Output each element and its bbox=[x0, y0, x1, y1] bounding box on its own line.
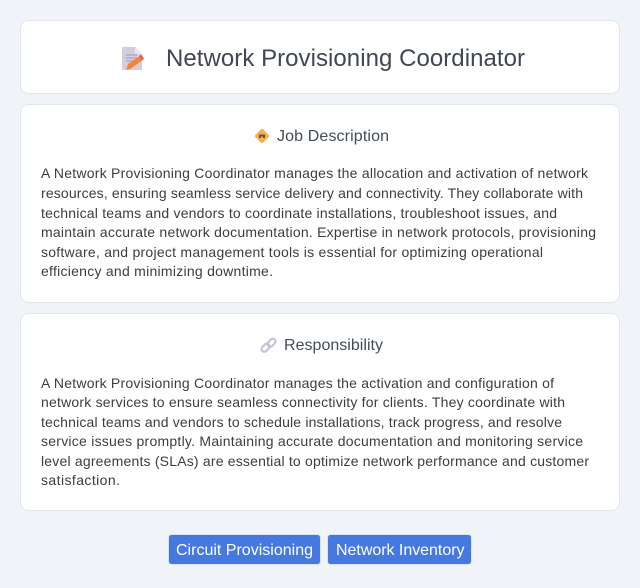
text block: job description: maintain accurate network documentation. Expertise in network protocols, provisioning bbox=[41, 224, 596, 240]
heading: job description: Job Description bbox=[277, 128, 389, 145]
tag: network inventory bbox=[328, 534, 472, 564]
text block: job description: resources, ensuring seamless service delivery and connectivity. They collaborate with bbox=[41, 185, 583, 201]
text block: responsibility: network services to ensure seamless connectivity for clients. They coordinate with bbox=[41, 394, 565, 410]
text block: responsibility: A Network Provisioning Coordinator manages the activation and configuration of bbox=[41, 375, 554, 391]
text block: job description: A Network Provisioning Coordinator manages the allocation and activation of network bbox=[41, 165, 589, 181]
title: Network Provisioning Coordinator bbox=[166, 45, 525, 72]
text block: job description: technical teams and vendors to coordinate installations, troubleshoot issues, and bbox=[41, 205, 557, 221]
text block: job description: efficiency and minimizing downtime. bbox=[41, 263, 273, 279]
tag: circuit provisioning: Circuit Provisioning bbox=[176, 542, 313, 559]
text block: responsibility bbox=[41, 375, 589, 488]
text block: job description: software, and project management tools is essential for optimizing operational bbox=[41, 244, 543, 260]
text block: responsibility: satisfaction. bbox=[41, 472, 120, 488]
text block: responsibility: service issues promptly. Maintaining accurate documentation and monitoring service bbox=[41, 433, 583, 449]
tag: network inventory: Network Inventory bbox=[336, 542, 464, 559]
panel: responsibility bbox=[20, 314, 620, 510]
heading: responsibility: Responsibility bbox=[284, 337, 383, 354]
text block: responsibility: level agreements (SLAs) are essential to optimize network performance and customer bbox=[41, 453, 589, 469]
panel: job description bbox=[20, 104, 620, 302]
icon: chain link bbox=[260, 338, 277, 353]
text block: responsibility: technical teams and vendors to schedule installations, track progress, and resolve bbox=[41, 414, 562, 430]
panel: title card bbox=[20, 20, 620, 94]
icon: document with pencil bbox=[122, 47, 144, 70]
text block: job description bbox=[41, 165, 596, 279]
icon: puzzle diamond bbox=[254, 128, 270, 144]
tag: circuit provisioning bbox=[168, 534, 320, 564]
